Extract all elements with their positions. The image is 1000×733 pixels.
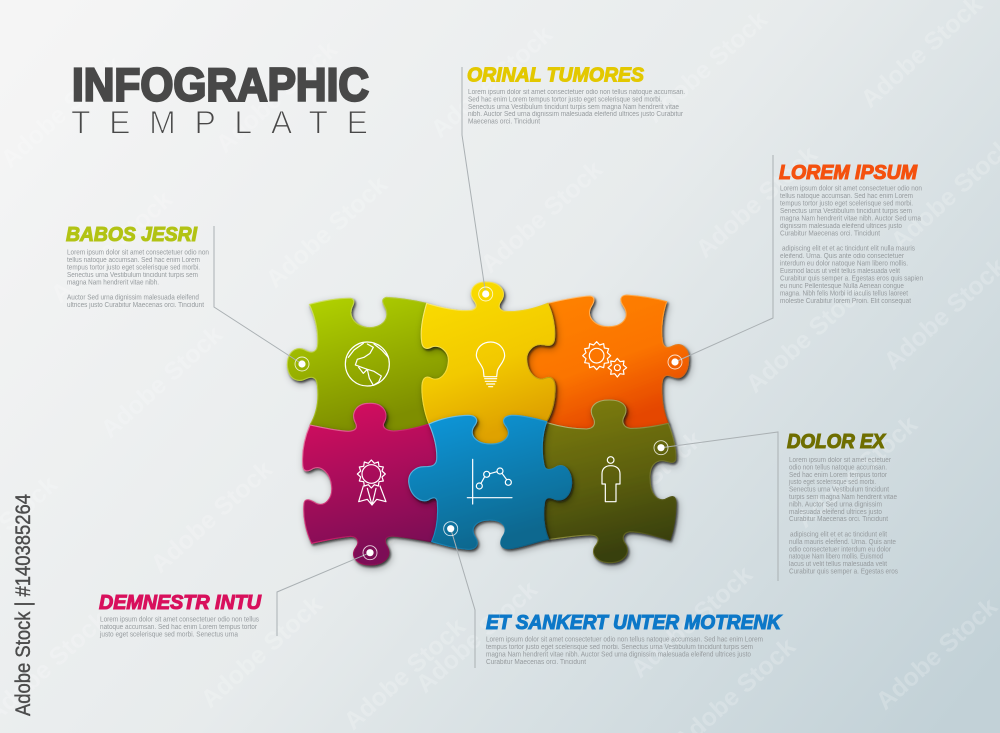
text block: Et Sankert Unter Motrenk: Curabitur Maecenas orci. Tincidunt [486,659,586,666]
piece: yellow [421,282,555,444]
text block: Dolor Ex: Sed hac enim Lorem tempus tortor [789,472,888,479]
watermark pattern: Adobe Stock [196,590,328,714]
piece: orange [527,295,689,429]
watermark pattern: Adobe Stock [311,305,443,429]
text block: Orinal Tumores: Sed hac enim Lorem tempus tortor justo eget scelerisque sed morbi. [468,96,662,103]
watermark pattern: Adobe Stock [476,155,608,279]
watermark pattern: Adobe Stock [411,575,543,699]
text block: Lorem Ipsum: magna Nam hendrerit vitae nibh. Auctor Sed urna [780,216,921,222]
watermark pattern: Adobe Stock [361,440,493,564]
text block: Babos Jesri [66,224,209,309]
piece: green [287,297,448,431]
icon: globe [345,342,389,386]
text block: Orinal Tumores: Senectus urna Vestibulum tincidunt turpis sem magna Nam hendrerit vitae [468,104,679,111]
text block: Demnestr Intu: natoque accumsan. Sed hac enim Lorem tempus tortor [100,624,258,631]
watermark pattern: Adobe Stock [871,592,1000,716]
text block: Dolor Ex: turpis sem magna Nam hendrerit vitae [789,494,897,501]
text block: Dolor Ex: Curabitur Maecenas orci. Tincidunt [789,516,888,523]
text block: Babos Jesri: Auctor Sed urna dignissim malesuada eleifend [67,294,199,302]
text block: Orinal Tumores: Lorem ipsum dolor sit amet consectetuer odio non tellus natoque accumsan. [468,89,685,96]
text block: Lorem Ipsum: LOREM IPSUM [779,162,918,184]
title [71,58,369,140]
watermark pattern: Adobe Stock [526,290,658,414]
text block: Dolor Ex: DOLOR EX [787,431,887,453]
text block: Et Sankert Unter Motrenk: Lorem ipsum dolor sit amet consectetuer odio non tellus natoque accumsan. Sed hac enim Lorem [486,636,763,644]
text block: Orinal Tumores: nibh. Auctor Sed urna dignissim malesuada eleifend ultrices justo Curabitur [468,111,684,118]
text block: Dolor Ex: odio non tellus natoque accumsan. [789,464,887,471]
text block: Demnestr Intu: DEMNESTR INTU [99,592,262,614]
connector dots [295,287,682,560]
puzzle [287,282,689,565]
text block: Lorem Ipsum: tellus natoque accumsan. Sed hac enim Lorem [780,193,913,200]
text block: Et Sankert Unter Motrenk: tempus tortor justo eget scelerisque sed morbi. Senectus urna Vestibulum tincidunt turpis sem [486,644,753,651]
text block: Lorem Ipsum: Euismod lacus ut velit tellus malesuada velit [780,268,900,275]
text block: Demnestr Intu: Lorem ipsum dolor sit amet consectetuer odio non tellus [100,616,260,624]
icon: line chart [467,459,512,504]
icon: gears [583,342,627,377]
text block: Lorem Ipsum: dignissim malesuada eleifend ultrices justo [780,223,902,230]
watermark pattern: Adobe Stock [426,20,558,144]
text block: Babos Jesri: ultrices justo Curabitur Maecenas orci. Tincidunt [67,302,204,309]
watermark pattern: Adobe Stock [46,185,178,309]
watermark pattern: Adobe Stock [211,35,343,159]
watermark pattern: Adobe Stock [339,612,471,733]
text block: Et Sankert Unter Motrenk [486,612,782,666]
text block: Orinal Tumores: Maecenas orci. Tincidunt [468,119,540,126]
text block: Et Sankert Unter Motrenk: ET SANKERT UNTER MOTRENK [486,612,782,634]
text block: Lorem Ipsum: Curabitur quis semper a. Egestas eros quis sapien [780,276,923,282]
text block: Babos Jesri: magna Nam hendrerit vitae nibh. [67,280,159,286]
text block: Demnestr Intu: justo eget scelerisque sed morbi. Senectus urna [99,632,238,638]
text block: Lorem Ipsum: molestie Curabitur lorem Proin. Elit consequat [780,298,911,305]
text block: Lorem Ipsum: tempus tortor justo eget scelerisque sed morbi. [780,200,913,208]
text block: Dolor Ex [787,431,898,576]
connector lines [214,67,778,668]
text block: Lorem Ipsum [779,162,923,305]
icon: award ribbon [357,460,386,505]
icon: light bulb [476,342,505,387]
piece: blue [409,415,572,549]
watermark pattern: Adobe Stock [626,560,758,684]
text block: Dolor Ex: odio consectetuer interdum eu dolor [789,546,892,553]
vertical stock id: Adobe Stock | #140385264 [12,494,35,716]
watermark pattern: Adobe Stock [146,455,278,579]
text block: Lorem Ipsum: Senectus urna Vestibulum tincidunt turpis sem [780,208,912,215]
watermark pattern: Adobe Stock [96,320,228,444]
text block: Dolor Ex: nibh. Auctor Sed urna dignissim [789,501,882,508]
text block: Dolor Ex: justo eget scelerisque sed morbi. [788,479,876,486]
text block: Lorem Ipsum: eu nunc Pellentesque Nulla Aenean congue [780,283,904,290]
watermark pattern: Adobe Stock [691,140,823,264]
text block: Babos Jesri: tellus natoque accumsan. Sed hac enim Lorem [67,257,200,264]
watermark pattern: Adobe Stock [576,425,708,549]
text block: Orinal Tumores [467,64,685,126]
text block: Dolor Ex: nulla mauris eleifend. Urna. Quis ante [789,539,896,546]
title: INFOGRAPHIC [72,58,369,110]
text block: Demnestr Intu [99,592,262,638]
text block: Dolor Ex: Lorem ipsum dolor sit amet ectetuer [789,457,892,464]
text block: Lorem Ipsum: adipiscing elit et et ac tincidunt elit nulla mauris [782,246,916,252]
piece: olive [542,400,676,563]
text block: Lorem Ipsum: eleifend. Urna. Quis ante odio consectetuer [780,253,905,260]
text block: Babos Jesri: Lorem ipsum dolor sit amet consectetuer odio non [67,250,209,256]
text block: Dolor Ex: adipiscing elit et et ac tincidunt elit [790,532,887,538]
text block: Lorem Ipsum: Curabitur Maecenas orci. Tincidunt [780,230,880,238]
text block: Dolor Ex: malesuada eleifend ultrices justo [789,509,882,516]
watermark pattern: Adobe Stock [641,5,773,129]
text block: Lorem Ipsum: Lorem ipsum dolor sit amet consectetuer odio non [780,186,922,192]
text block: Dolor Ex: Senectus urna Vestibulum tincidunt [789,487,889,494]
text block: Lorem Ipsum: magna. Nibh felis Morbi id iaculis tellus laoreet [780,290,908,298]
text block: Dolor Ex: lacus ut velit tellus malesuada velit [789,561,887,568]
watermark pattern: Adobe Stock [261,170,393,294]
text block: Lorem Ipsum: interdum eu dolor natoque Nam libero mollis. [780,260,908,268]
piece: magenta [303,403,438,565]
text block: Babos Jesri: BABOS JESRI [66,224,197,246]
icon: person [602,457,620,502]
text block: Babos Jesri: Senectus urna Vestibulum tincidunt turpis sem [67,272,198,279]
watermark pattern: Adobe Stock [741,275,873,399]
watermark pattern: Adobe Stock [791,410,923,534]
text block: Dolor Ex: natoque Nam libero mollis. Euismod [789,554,883,561]
title: TEMPLATE [71,104,368,140]
text block: Et Sankert Unter Motrenk: magna Nam hendrerit vitae nibh. Auctor Sed urna dignissim malesuada eleifend ultrices justo [486,652,751,658]
text block: Orinal Tumores: ORINAL TUMORES [467,64,645,86]
text block: Babos Jesri: tempus tortor justo eget scelerisque sed morbi. [67,264,200,272]
text block: Dolor Ex: Curabitur quis semper a. Egestas eros [789,568,898,576]
